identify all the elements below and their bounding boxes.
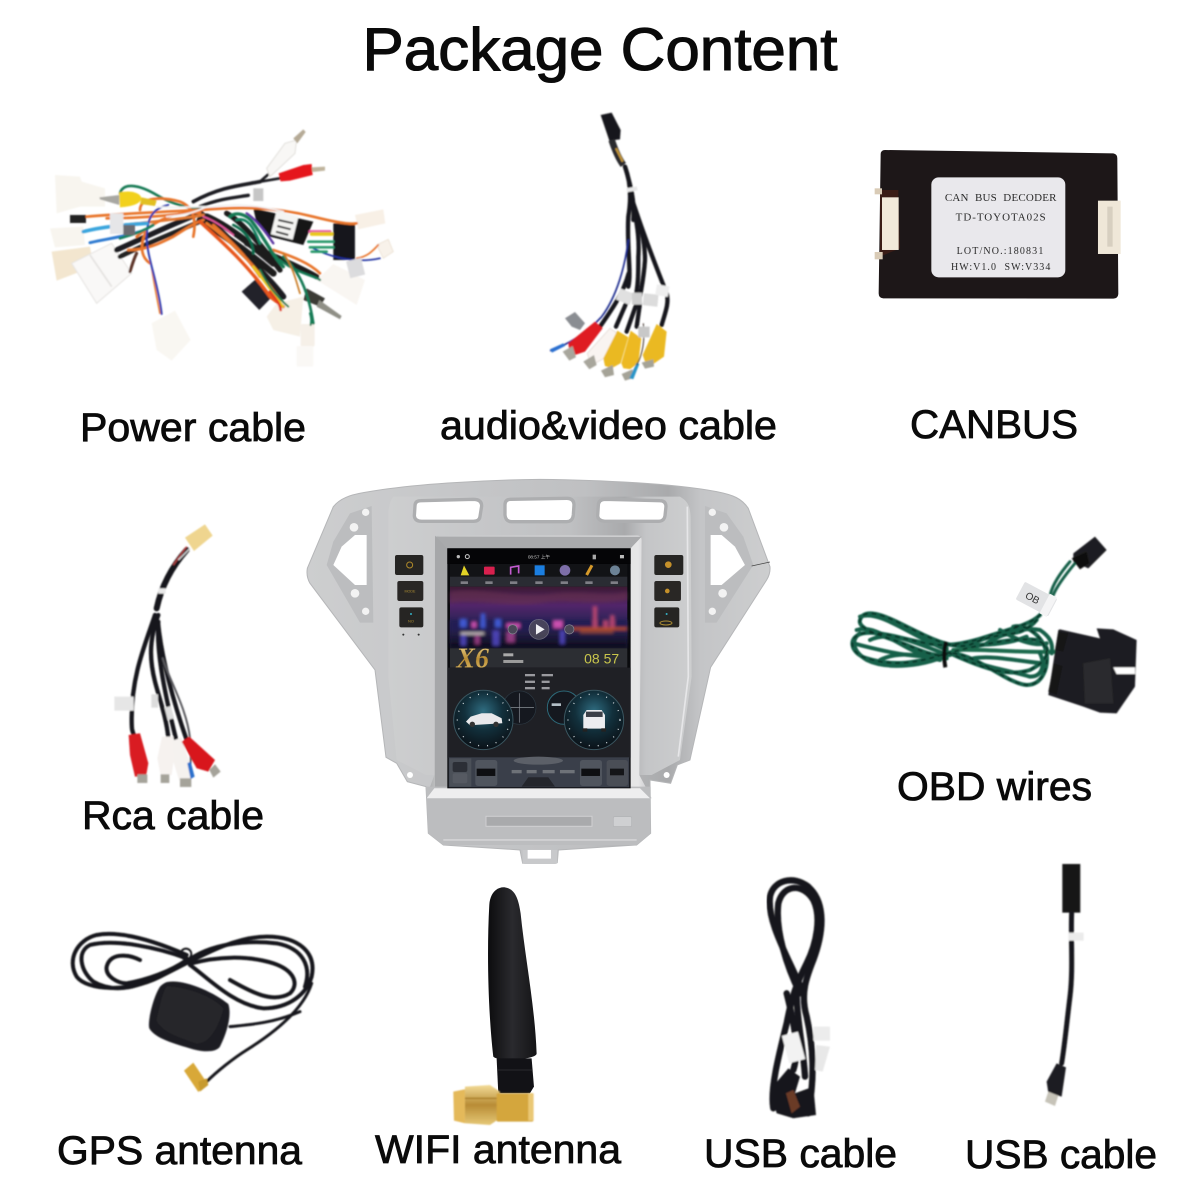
caption: USB cable left: USB cable (704, 1132, 897, 1176)
caption: USB cable right: USB cable (965, 1133, 1157, 1177)
WIFI antenna image (453, 887, 537, 1125)
caption: audio video cable: audio&video cable (440, 404, 777, 448)
caption: WIFI antenna: WIFI antenna (375, 1128, 622, 1172)
panel: GPS and WIFI antennas (57, 887, 622, 1173)
app icons (450, 564, 627, 587)
status bar: 08:57 上午 (528, 553, 550, 560)
decoder label text: HW:V1.0 SW:V334 (951, 262, 1050, 273)
touchscreen (447, 548, 631, 788)
panel: USB cables (704, 864, 1157, 1177)
GPS antenna image (73, 934, 313, 1092)
caption: RCA cable: Rca cable (82, 794, 264, 838)
night city video (450, 587, 627, 648)
left buttons: NO (408, 619, 414, 624)
dashboard area (447, 668, 631, 758)
OBD label: OB (1023, 591, 1041, 607)
decoder label text: TD-TOYOTA02S (956, 212, 1046, 224)
power cable harness image (50, 129, 393, 367)
decoder box (875, 150, 1121, 299)
audio video cable image (550, 113, 669, 381)
lower panel details (407, 772, 670, 864)
short USB cable (1045, 864, 1084, 1106)
left side cutout (327, 506, 373, 623)
panel: audio video cable (440, 113, 777, 448)
clock bar: X6 (455, 643, 489, 674)
right buttons (654, 555, 683, 627)
caption: CANBUS: CANBUS (910, 403, 1078, 447)
RCA cable image (114, 524, 221, 787)
left buttons: MODE (405, 589, 416, 593)
status bar (447, 548, 631, 564)
head unit faceplate (307, 479, 770, 864)
OBD cable image (852, 537, 1137, 713)
decoder label text (945, 192, 1057, 273)
caption: power cable: Power cable (80, 406, 306, 450)
USB cable coil (770, 880, 830, 1118)
left buttons (395, 555, 423, 636)
panel: CANBUS decoder (875, 150, 1121, 447)
climate bar (449, 757, 629, 787)
panel: RCA cable (82, 524, 264, 838)
right side cutout (705, 506, 753, 623)
title: Package Content (362, 16, 838, 83)
clock bar: 08 57 (584, 650, 619, 666)
panel: OBD wires (852, 537, 1137, 809)
panel: head unit (307, 479, 770, 864)
clock bar (450, 643, 627, 674)
air vents (414, 498, 666, 522)
caption: GPS antenna: GPS antenna (57, 1129, 303, 1173)
decoder label text: LOT/NO.:180831 (957, 246, 1043, 257)
bezel (426, 536, 652, 798)
panel: power cable (50, 129, 393, 450)
caption: OBD wires: OBD wires (897, 765, 1092, 809)
decoder label text: CAN BUS DECODER (945, 192, 1057, 204)
